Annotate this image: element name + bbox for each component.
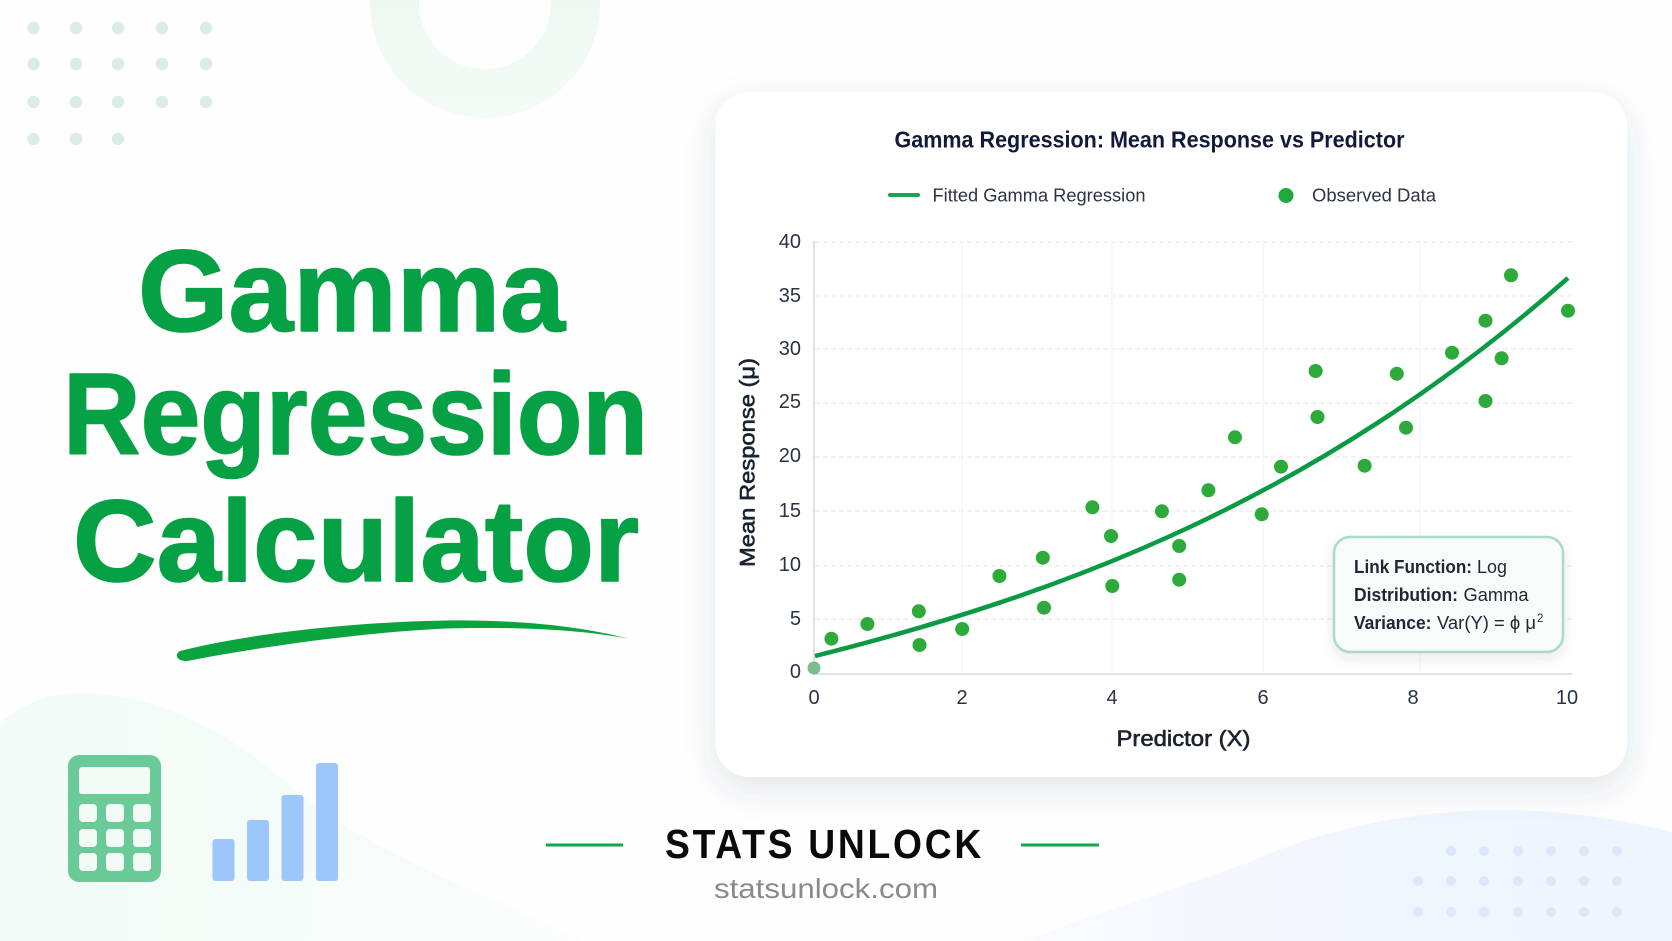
background wave: bottom right <box>1023 810 1672 941</box>
dot grid: bottom right <box>1413 846 1622 917</box>
y axis tick labels: 35 <box>779 285 801 307</box>
grid lines <box>815 242 1572 674</box>
legend: Observed Data <box>1312 186 1437 206</box>
x axis tick labels: 0 <box>808 687 820 709</box>
callout: model details: Log <box>1477 557 1507 577</box>
panel: chart card <box>716 92 1627 777</box>
y axis tick labels: 5 <box>790 608 801 630</box>
dot grid: top left <box>27 22 212 145</box>
y axis tick labels <box>779 231 801 683</box>
background wave: bottom left <box>0 693 580 941</box>
chart title: Gamma Regression: Mean Response vs Predictor <box>894 126 1405 152</box>
main title: Regression <box>63 349 648 479</box>
main title <box>63 226 648 606</box>
x axis tick labels: 6 <box>1257 687 1269 709</box>
y axis tick labels: 30 <box>779 338 801 360</box>
axes <box>814 241 1572 674</box>
observed data points <box>808 268 1575 674</box>
callout: model details: Variance: <box>1354 613 1432 633</box>
legend: Fitted Gamma Regression <box>932 186 1146 206</box>
y axis tick labels: 15 <box>779 500 801 522</box>
brand block <box>546 821 1099 904</box>
y axis tick labels: 25 <box>779 391 801 413</box>
brush underline <box>177 620 629 661</box>
brand block: STATS UNLOCK <box>665 821 984 867</box>
y axis title: Mean Response (μ) <box>736 358 760 567</box>
callout: model details: Distribution: <box>1354 585 1458 605</box>
icon: bar chart <box>212 763 338 881</box>
y axis tick labels: 20 <box>779 445 801 467</box>
y axis tick labels: 0 <box>790 661 801 683</box>
x axis title: Predictor (X) <box>1116 726 1250 751</box>
y axis tick labels: 10 <box>779 554 801 576</box>
x axis tick labels: 2 <box>956 687 968 709</box>
fitted regression curve <box>815 278 1568 656</box>
callout: model details: Gamma <box>1464 585 1529 605</box>
callout: model details: Var(Y) = ϕ μ <box>1437 613 1536 633</box>
x axis tick labels <box>808 687 1578 709</box>
callout: model details: 2 <box>1537 613 1543 625</box>
main title: Calculator <box>73 476 639 606</box>
x axis tick labels: 10 <box>1556 687 1578 709</box>
callout: model details: Link Function: <box>1354 557 1472 577</box>
x axis tick labels: 4 <box>1106 687 1118 709</box>
brand block: statsunlock.com <box>714 873 938 904</box>
y axis tick labels: 40 <box>779 231 801 253</box>
x axis tick labels: 8 <box>1407 687 1419 709</box>
decorative ring <box>370 0 600 118</box>
main title: Gamma <box>138 226 566 356</box>
legend <box>888 186 1437 206</box>
callout: model details <box>1334 537 1563 652</box>
icon: calculator <box>68 755 161 882</box>
